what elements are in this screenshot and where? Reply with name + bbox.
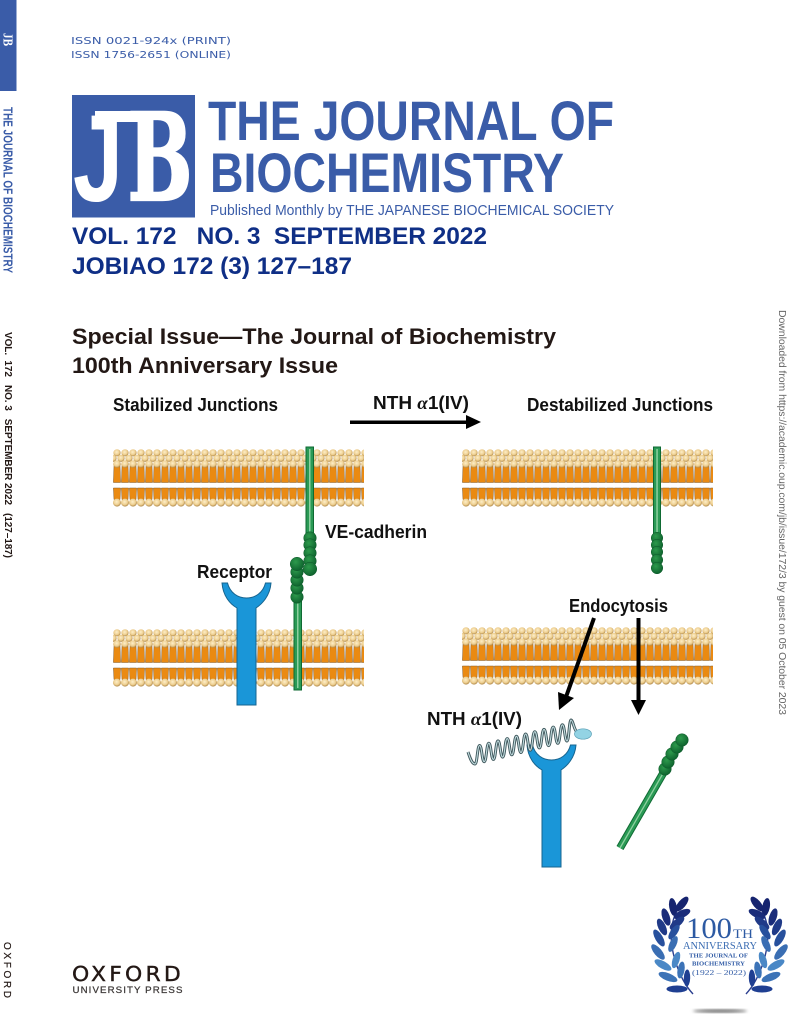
diagram labels [113, 393, 713, 729]
ISSN numbers: ISSN 0021-924x (PRINT) [71, 36, 231, 47]
laurel: right [746, 895, 790, 994]
volume heading [72, 223, 487, 280]
publisher line: Published Monthly by THE JAPANESE BIOCHEMICAL SOCIETY [210, 203, 614, 219]
receptor: left [222, 583, 271, 705]
anniversary text: BIOCHEMISTRY [692, 960, 745, 968]
diagram labels: Destabilized Junctions [527, 395, 713, 415]
special issue heading: Special Issue—The Journal of Biochemistry [72, 324, 557, 349]
arrow: endocytosis right [631, 618, 646, 715]
Oxford University Press logo: UNIVERSITY PRESS [72, 985, 184, 995]
VE-cadherin: upper right [651, 447, 663, 574]
diagram labels: Receptor [197, 562, 272, 582]
ISSN numbers [71, 36, 231, 61]
anniversary text [683, 912, 757, 977]
badge shadow [693, 1009, 747, 1013]
VE-cadherin: released [620, 734, 688, 848]
spine: journal title: THE JOURNAL OF BIOCHEMISTRY [0, 107, 14, 274]
download watermark: Downloaded from https://academic.oup.com/jb/issue/172/3 by guest on 05 October 2023 [776, 310, 788, 715]
journal title [208, 89, 614, 204]
arrow: endocytosis left [558, 618, 594, 710]
laurel: left [649, 895, 693, 994]
spine: volume information: VOL. 172 NO. 3 SEPTEMBER 2022 (127–187) [2, 332, 13, 558]
Oxford University Press logo [72, 962, 184, 995]
NTH alpha1(IV) helix [468, 720, 592, 764]
membrane: top right [462, 449, 713, 507]
diagram labels: VE-cadherin [325, 522, 427, 542]
diagram labels: Endocytosis [569, 596, 668, 616]
VE-cadherin: lower left [290, 557, 304, 690]
anniversary text: 100 [686, 912, 732, 945]
anniversary text: (1922 – 2022) [692, 968, 747, 977]
special issue heading: 100th Anniversary Issue [72, 353, 338, 378]
VE-cadherin: upper left [303, 447, 317, 576]
membrane: bottom right [462, 627, 713, 685]
diagram labels: NTH α1(IV) [427, 709, 522, 729]
diagram labels: Stabilized Junctions [113, 395, 278, 415]
JB logo: B [128, 86, 192, 229]
membrane: bottom left [113, 629, 364, 687]
JB logo: J [73, 91, 123, 228]
journal title: THE JOURNAL OF [208, 89, 614, 152]
Oxford University Press logo: OXFORD [72, 962, 184, 986]
arrow: NTH treatment [350, 415, 481, 429]
receptor: right [527, 745, 576, 867]
ISSN numbers: ISSN 1756-2651 (ONLINE) [71, 50, 231, 61]
membrane: top left [113, 449, 364, 507]
volume heading: JOBIAO 172 (3) 127–187 [72, 253, 352, 280]
journal title: BIOCHEMISTRY [210, 141, 564, 204]
special issue heading [72, 324, 557, 378]
anniversary badge [649, 895, 790, 1013]
anniversary text: TH [733, 927, 753, 941]
JB logo [72, 86, 195, 229]
diagram labels: NTH α1(IV) [373, 393, 469, 413]
anniversary text: ANNIVERSARY [683, 941, 757, 952]
volume heading: VOL. 172 NO. 3 SEPTEMBER 2022 [72, 223, 487, 250]
anniversary text: THE JOURNAL OF [689, 952, 748, 960]
spine: Oxford: OXFORD [1, 942, 12, 998]
spine: blue JB tab [0, 0, 16, 91]
